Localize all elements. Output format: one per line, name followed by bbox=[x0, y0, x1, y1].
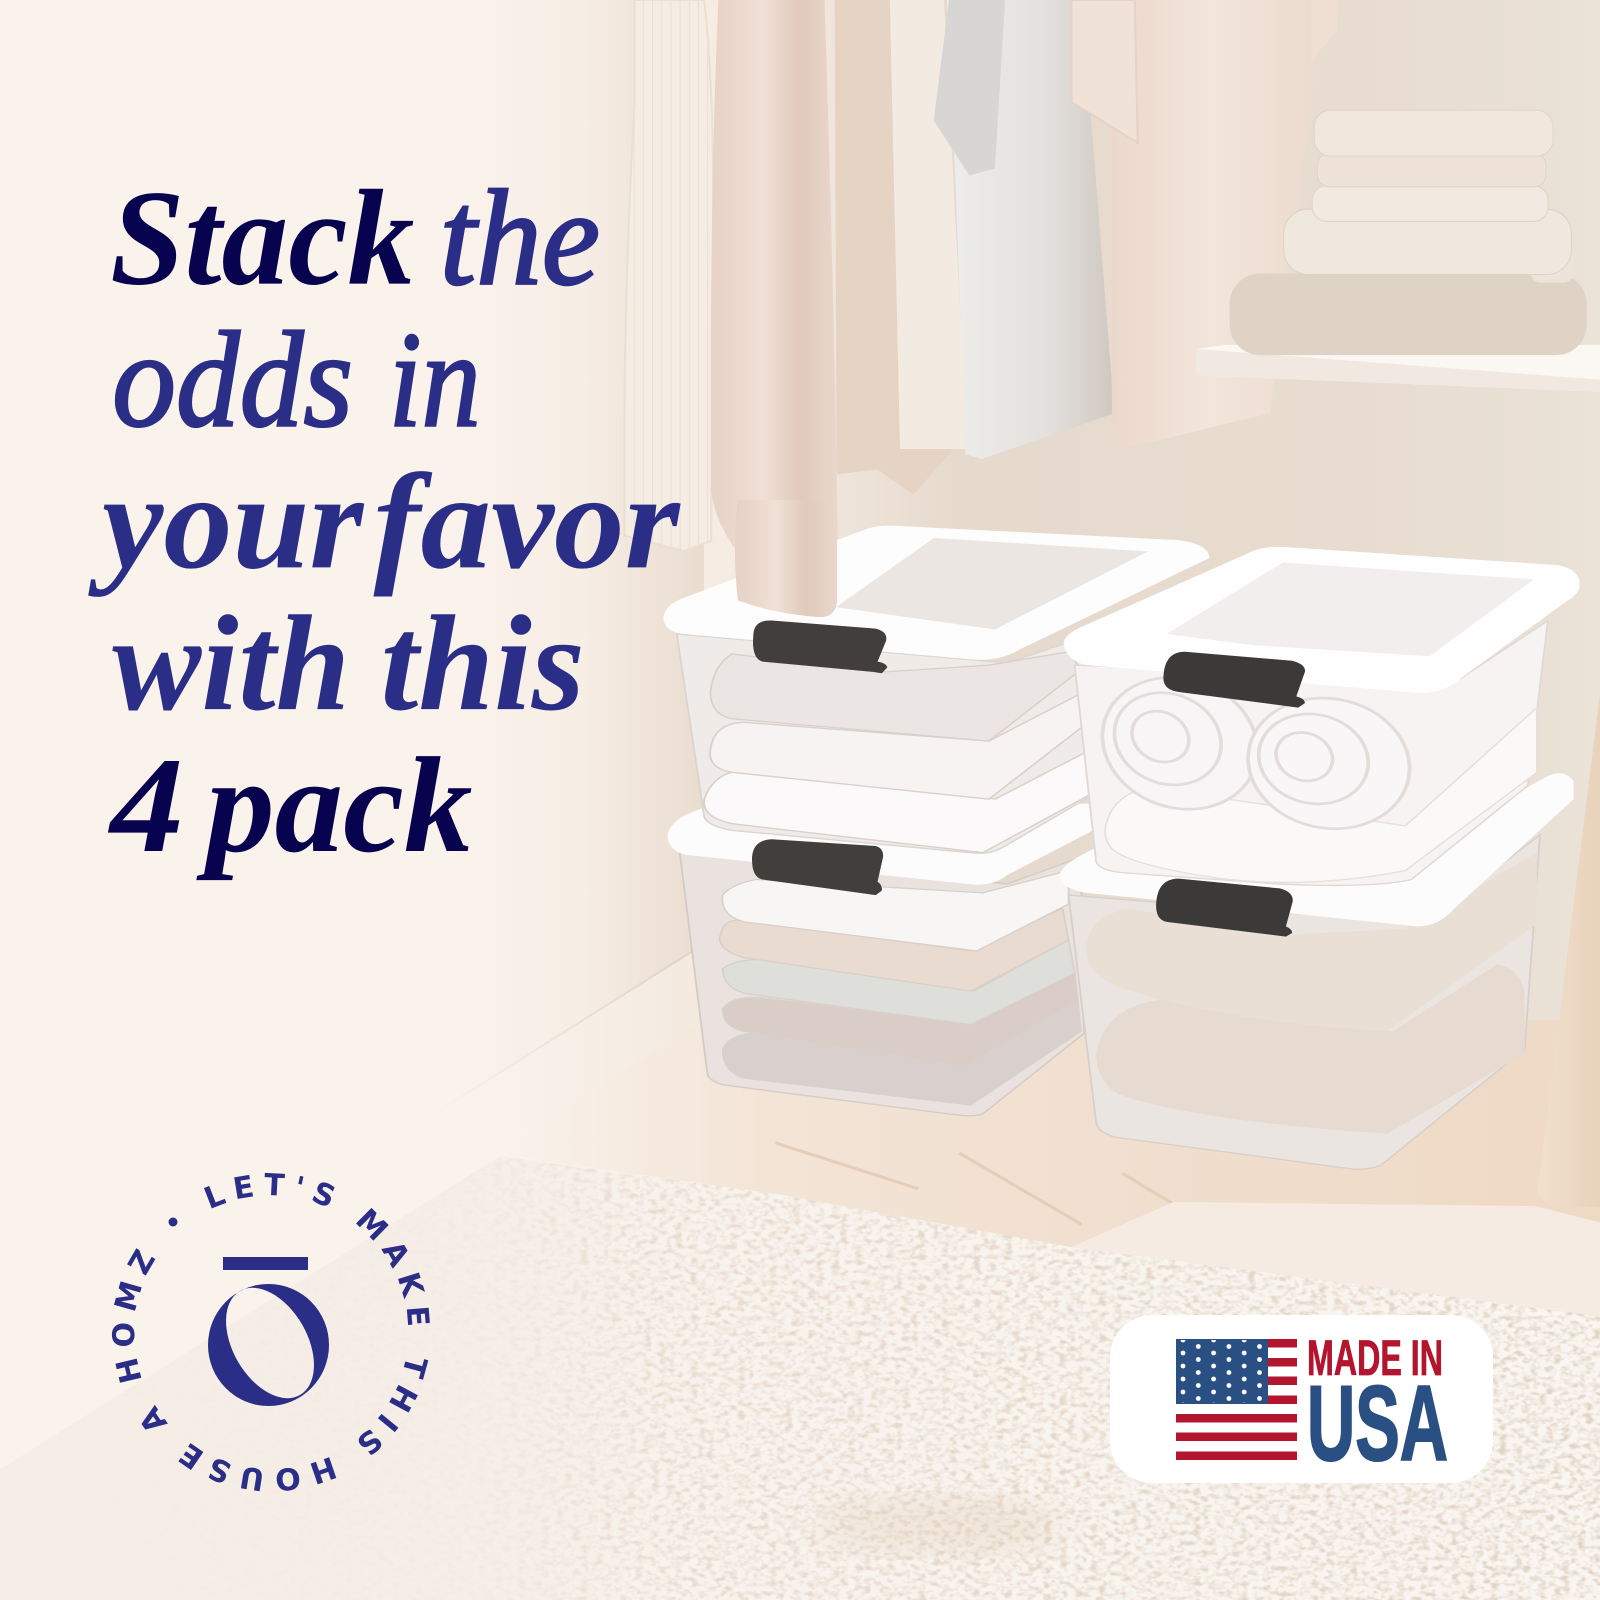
rolled towel right bbox=[1225, 683, 1432, 844]
logo ring text: LET'S MAKE THIS HOUSE A HOMZ bbox=[112, 1172, 430, 1492]
made in label: MADE IN bbox=[1307, 1330, 1443, 1386]
headline: in bbox=[389, 304, 481, 456]
storage bins, drawn on a local grid bbox=[663, 500, 1580, 1169]
side wall and baseboard bbox=[429, 0, 704, 1148]
USA label: USA bbox=[1307, 1363, 1448, 1483]
logo dot bbox=[168, 1218, 178, 1226]
headline: the bbox=[440, 162, 600, 314]
latch bbox=[752, 839, 883, 895]
latch bbox=[1156, 879, 1293, 937]
latch bbox=[753, 620, 887, 673]
headline: your bbox=[88, 445, 365, 597]
latch bbox=[1163, 652, 1305, 708]
folded towels on shelf bbox=[1230, 110, 1587, 355]
rolled towel left bbox=[1079, 663, 1281, 824]
bin: top right with rolled towels bbox=[1064, 547, 1580, 885]
circular brand logo bbox=[112, 1172, 430, 1492]
bin: bottom left with folded clothes bbox=[668, 804, 1093, 1116]
made in USA badge bbox=[1110, 1315, 1493, 1483]
logo letter o bbox=[208, 1284, 329, 1406]
headline: Stack bbox=[110, 162, 414, 314]
hanging clothes bbox=[624, 0, 1339, 617]
rug bbox=[0, 1153, 1600, 1600]
logo macron bar bbox=[223, 1257, 308, 1270]
american flag bbox=[1176, 1339, 1297, 1460]
sleeve resting on lid bbox=[735, 500, 837, 617]
lid bbox=[1059, 773, 1574, 926]
bin: bottom right with pillows bbox=[1059, 773, 1574, 1169]
headline: pack bbox=[196, 729, 472, 881]
headline bbox=[88, 162, 681, 881]
closet shelf bbox=[1196, 345, 1600, 392]
wooden closet upright bbox=[1538, 694, 1600, 1207]
headline: favor bbox=[373, 445, 681, 597]
lid bbox=[668, 804, 1093, 885]
bin: top left with white folded towels bbox=[663, 526, 1209, 853]
lid bbox=[663, 526, 1209, 660]
headline: with bbox=[112, 587, 350, 739]
badge background bbox=[1110, 1315, 1493, 1483]
lid bbox=[1064, 547, 1580, 693]
wooden floor bbox=[490, 1020, 1600, 1316]
headline: this bbox=[381, 587, 585, 739]
headline: 4 bbox=[107, 729, 184, 881]
headline: odds bbox=[112, 304, 353, 456]
